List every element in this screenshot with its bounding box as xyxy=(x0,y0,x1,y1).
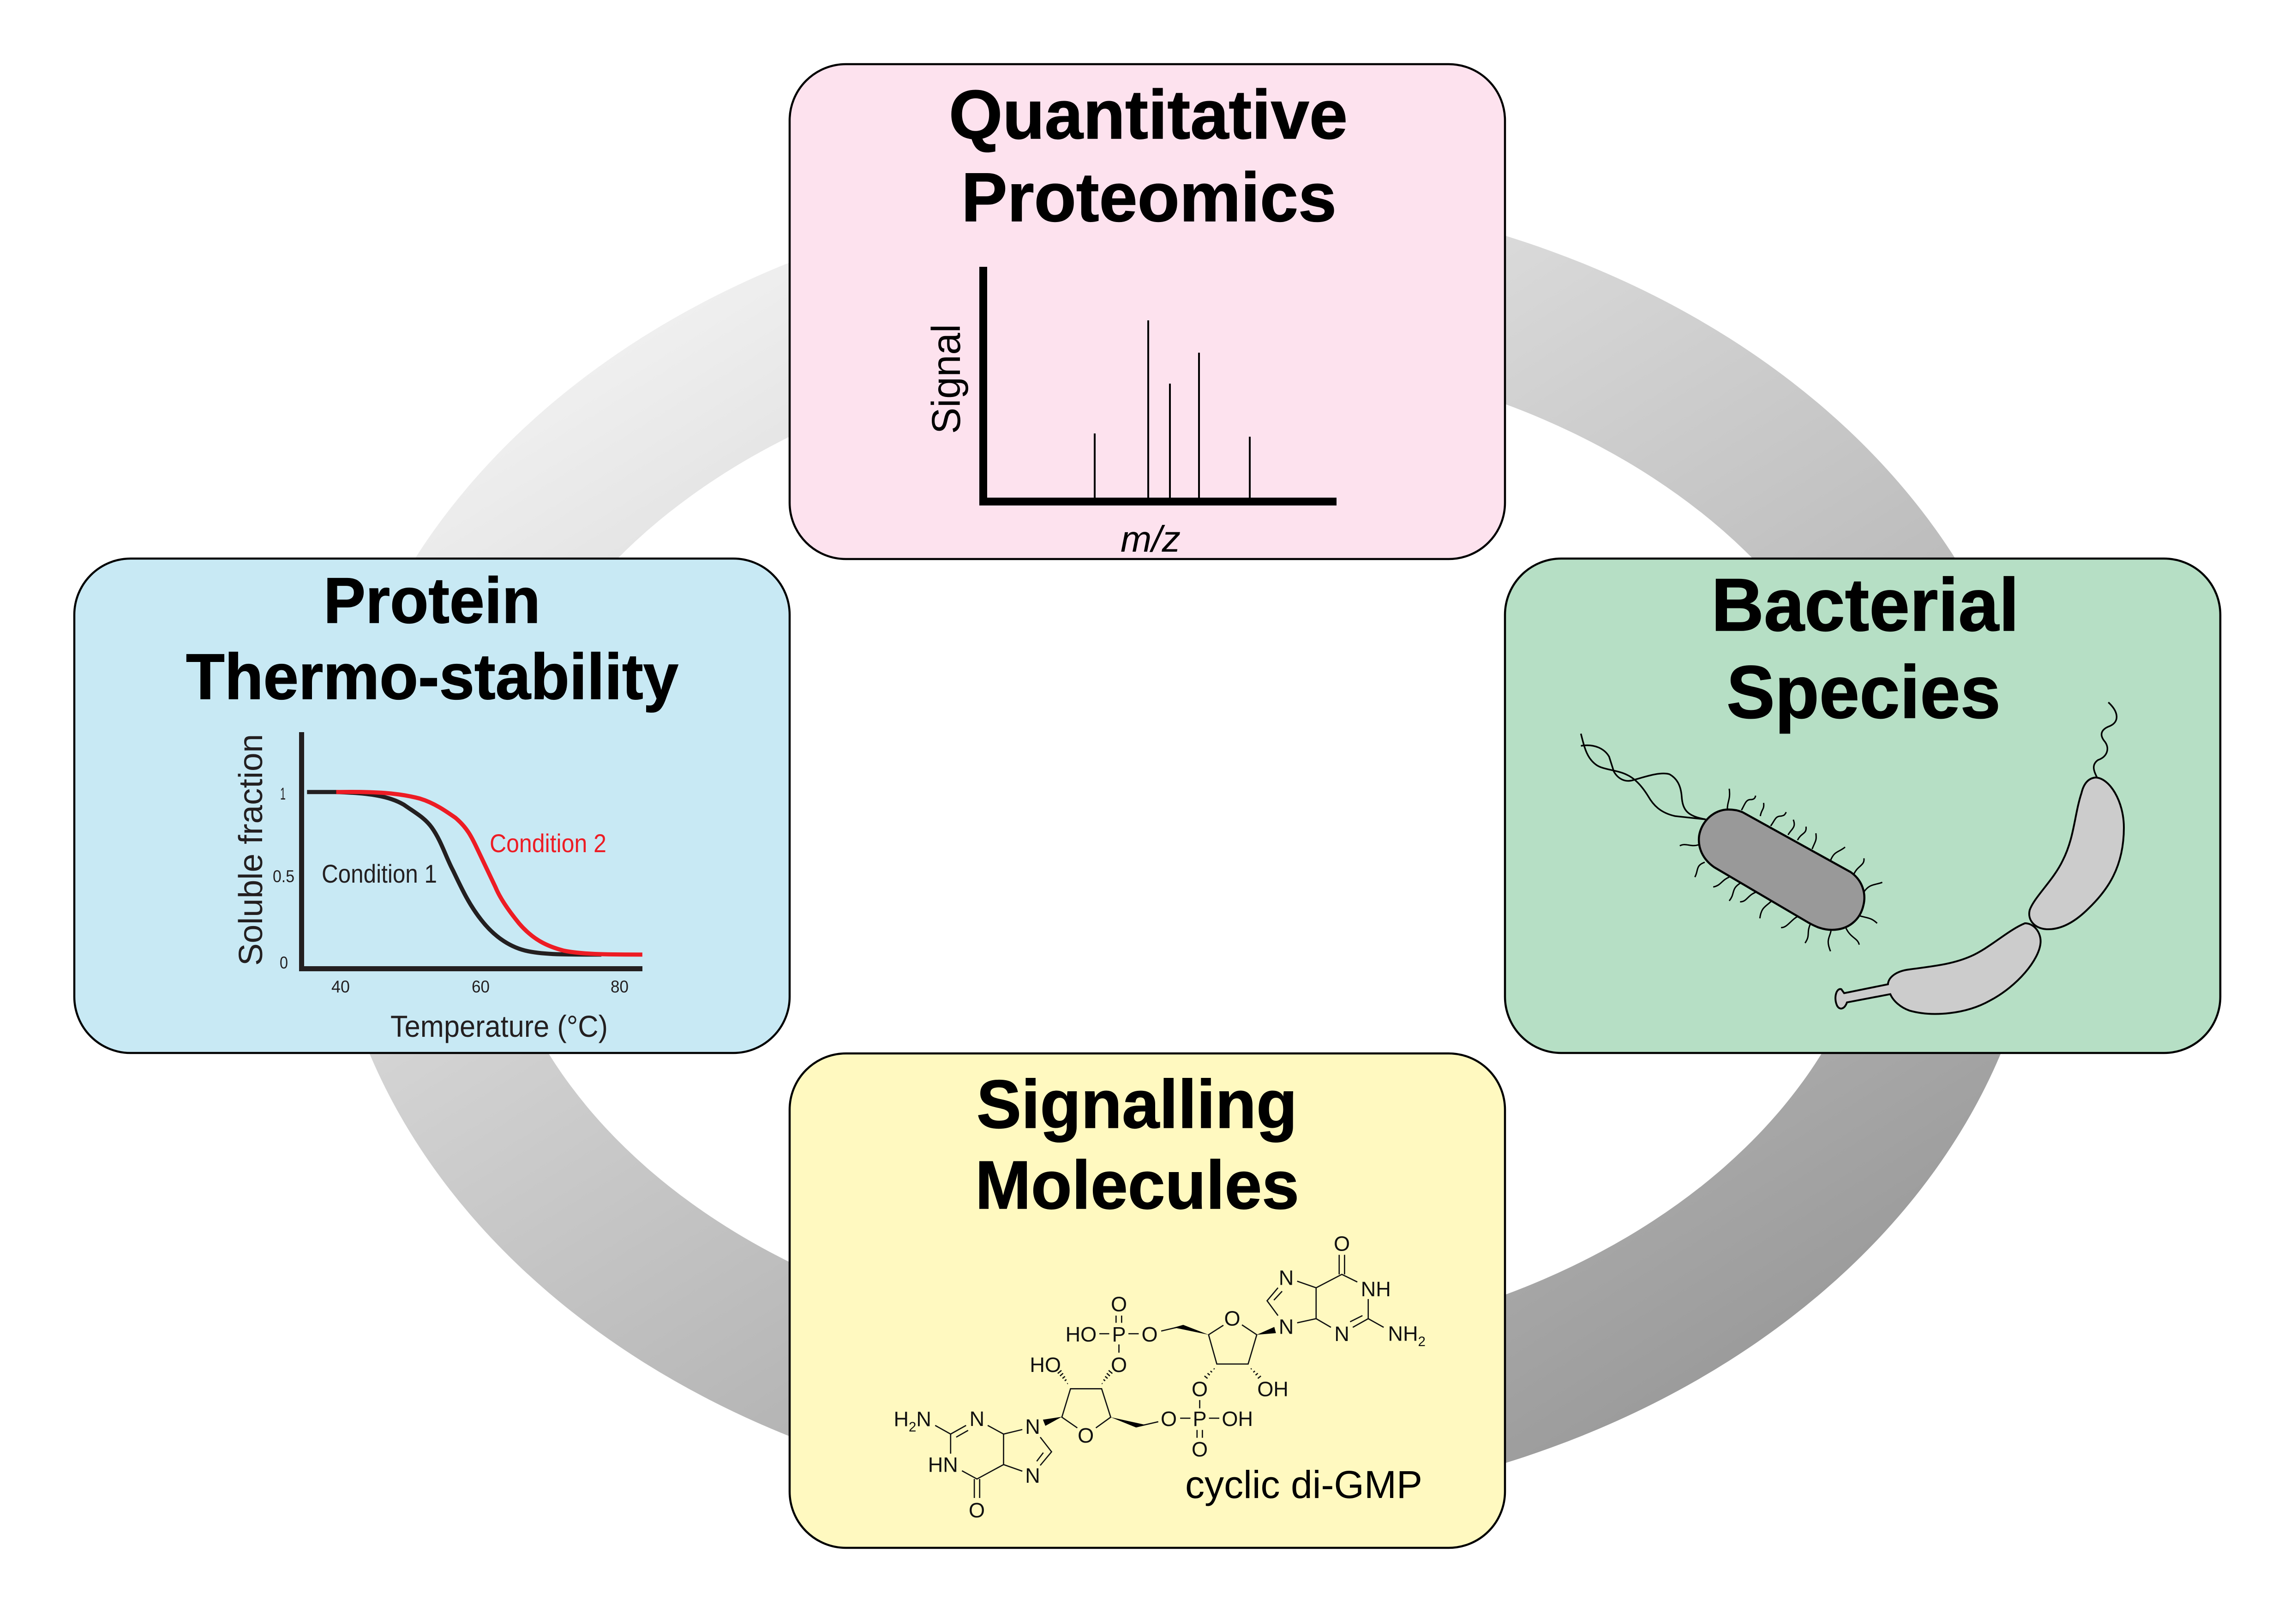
heading xyxy=(186,564,678,713)
heading: Protein xyxy=(324,564,540,637)
gradient ring connecting the panels xyxy=(328,188,2043,1511)
chemical structure: cyclic di-GMP: O xyxy=(1161,1407,1177,1431)
chemical structure: cyclic di-GMP: O xyxy=(1141,1323,1158,1346)
molecule caption: cyclic di-GMP xyxy=(1185,1463,1422,1506)
panel background xyxy=(790,64,1505,559)
chemical structure: cyclic di-GMP: O xyxy=(1192,1438,1208,1461)
chemical structure: cyclic di-GMP: P xyxy=(1112,1323,1126,1346)
chemical structure: cyclic di-GMP: O xyxy=(1334,1232,1350,1256)
chemical structure: cyclic di-GMP: OH xyxy=(1257,1377,1289,1401)
chemical structure: cyclic di-GMP: P xyxy=(1193,1407,1207,1431)
heading xyxy=(949,76,1348,236)
panel: protein thermo-stability xyxy=(74,559,790,1053)
melting curve chart: 40 xyxy=(331,977,350,996)
melting curve chart: Condition 2 xyxy=(490,829,606,858)
panel background xyxy=(1505,559,2220,1053)
melting curve chart: 1 xyxy=(280,784,286,803)
heading: Bacterial xyxy=(1711,563,2019,647)
chemical structure: cyclic di-GMP: O xyxy=(1192,1377,1208,1401)
chemical structure: cyclic di-GMP: N xyxy=(970,1407,984,1431)
melting curve chart: 0 xyxy=(280,953,288,972)
chemical structure: cyclic di-GMP: O xyxy=(1111,1293,1127,1316)
chemical structure: cyclic di-GMP: NH xyxy=(1361,1277,1391,1301)
chemical structure: cyclic di-GMP: O xyxy=(1111,1353,1127,1377)
melting curve chart: 60 xyxy=(472,977,490,996)
melting curve chart: Soluble fraction xyxy=(233,734,270,966)
chemical structure: cyclic di-GMP: HN xyxy=(928,1453,958,1477)
heading: Quantitative xyxy=(949,76,1348,153)
mass spectrum chart: m/z xyxy=(1121,518,1181,559)
chemical structure: cyclic di-GMP: H xyxy=(893,1407,909,1431)
heading xyxy=(1711,563,2019,734)
chemical structure: cyclic di-GMP: O xyxy=(1078,1424,1094,1447)
panel: signalling molecules xyxy=(790,1053,1505,1548)
chemical structure: cyclic di-GMP: 2 xyxy=(909,1420,916,1435)
chemical structure: cyclic di-GMP: OH xyxy=(1222,1407,1253,1431)
icon: curved bacterium pair with flagellum and stalk xyxy=(1835,702,2124,1014)
heading xyxy=(975,1066,1299,1223)
melting curve chart: 80 xyxy=(611,977,629,996)
heading: Proteomics xyxy=(961,158,1337,236)
melting curve chart: Condition 1 xyxy=(322,859,437,888)
chemical structure: cyclic di-GMP: N xyxy=(1279,1266,1294,1289)
chemical structure: cyclic di-GMP: 2 xyxy=(1418,1334,1426,1349)
chemical structure: cyclic di-GMP: N xyxy=(1334,1322,1349,1346)
chemical structure: cyclic di-GMP: N xyxy=(1025,1415,1040,1438)
chemical structure: cyclic di-GMP: N xyxy=(1279,1315,1294,1339)
chemical structure: cyclic di-GMP: NH xyxy=(1388,1322,1418,1345)
chemical structure: cyclic di-GMP xyxy=(893,1232,1426,1522)
chemical structure: cyclic di-GMP: N xyxy=(1025,1464,1040,1487)
panel: quantitative proteomics xyxy=(790,64,1505,559)
heading: Thermo-stability xyxy=(186,640,678,713)
panel background xyxy=(790,1053,1505,1548)
mass spectrum chart xyxy=(924,267,1337,559)
mass spectrum chart: Signal xyxy=(924,324,969,434)
icon: rod bacterium with flagella and pili xyxy=(1581,734,1882,951)
melting curve chart xyxy=(233,732,642,1043)
panel background xyxy=(74,559,790,1053)
melting curve chart: 0.5 xyxy=(273,867,294,886)
chemical structure: cyclic di-GMP: HO xyxy=(1030,1353,1061,1377)
chemical structure: cyclic di-GMP: HO xyxy=(1066,1323,1097,1346)
heading: Signalling xyxy=(977,1066,1297,1143)
panel: bacterial species xyxy=(1505,559,2220,1053)
heading: Molecules xyxy=(975,1147,1299,1223)
heading: Species xyxy=(1726,650,2001,734)
chemical structure: cyclic di-GMP: N xyxy=(916,1407,931,1431)
chemical structure: cyclic di-GMP: O xyxy=(1224,1306,1241,1330)
melting curve chart: Temperature (°C) xyxy=(390,1009,608,1043)
chemical structure: cyclic di-GMP: O xyxy=(969,1498,985,1522)
